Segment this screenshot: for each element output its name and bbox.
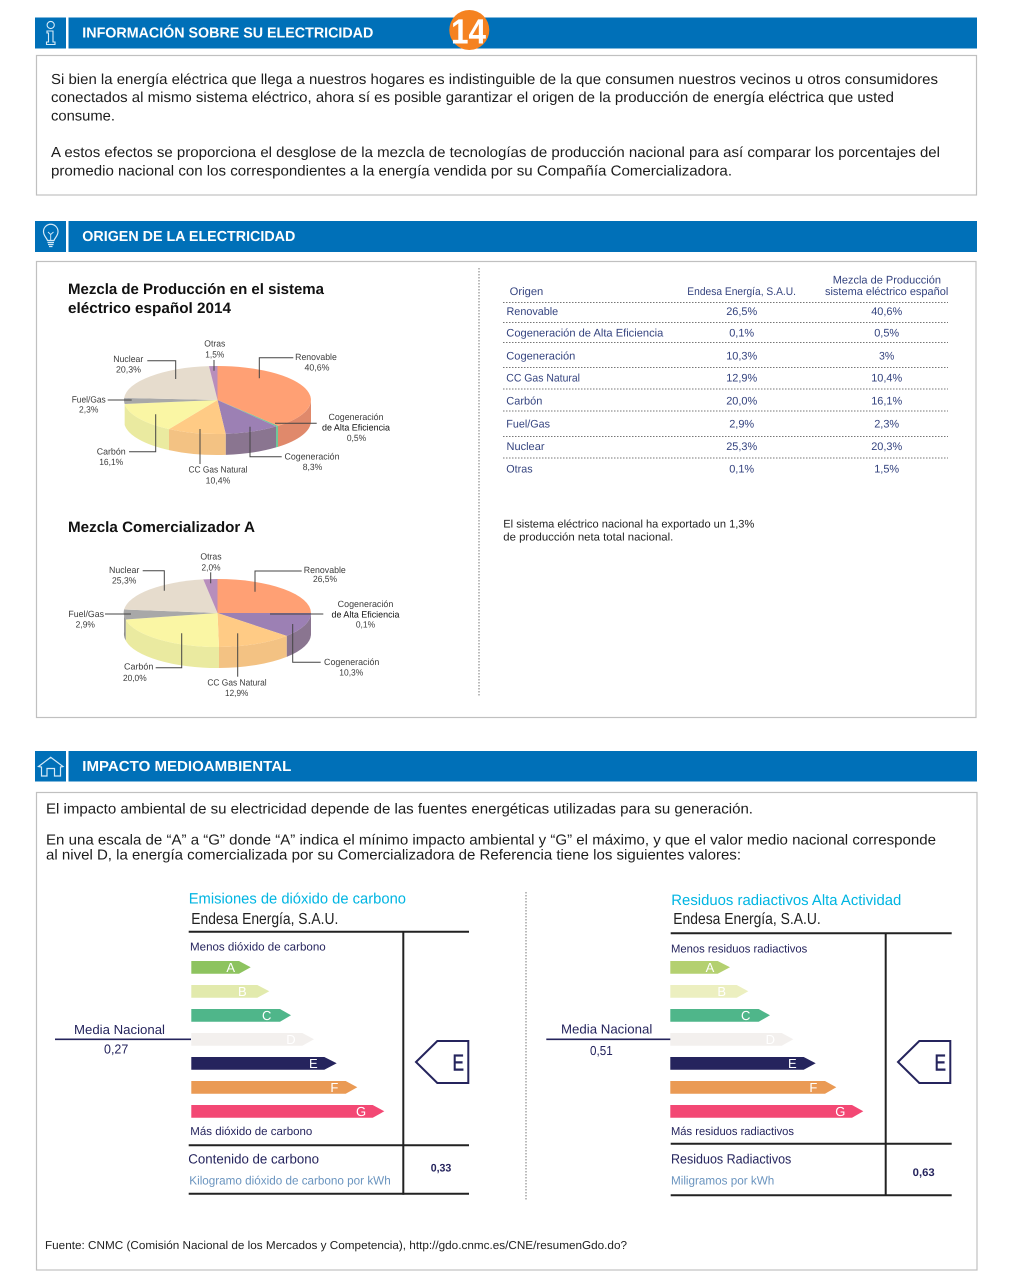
pie chart: mezcla de producción 2014: Nuclear xyxy=(113,354,143,364)
row: otras: 0,1% xyxy=(729,464,754,476)
pie chart: mezcla de producción 2014: Fuel/Gas xyxy=(72,394,106,404)
row: carbón: Carbón xyxy=(506,395,542,407)
media nacional marker xyxy=(546,1021,670,1058)
pie chart: mezcla de producción 2014: 20,3% xyxy=(116,365,141,375)
text block: nota de exportación: El sistema eléctrico nacional ha exportado un 1,3% xyxy=(503,519,755,531)
panel: impacto medioambiental xyxy=(36,792,977,1270)
heading: mezcla de producción xyxy=(68,281,325,317)
rating arrow D: D xyxy=(766,1032,775,1047)
scale top label: Menos dióxido de carbono xyxy=(190,942,326,954)
row: fuel/gas xyxy=(506,418,899,430)
rating arrow D xyxy=(670,1032,793,1047)
row: cogeneración de alta eficiencia xyxy=(506,328,899,340)
table header xyxy=(510,274,948,298)
row: renovable xyxy=(506,306,902,318)
header: impacto medioambiental xyxy=(35,751,977,782)
row: cogeneración: Cogeneración xyxy=(506,350,575,362)
rating arrow E: E xyxy=(788,1056,797,1071)
row: renovable: Renovable xyxy=(506,306,558,318)
scale top label: Menos residuos radiactivos xyxy=(671,943,808,955)
rating arrow F xyxy=(191,1080,357,1095)
pie chart: mezcla comercializador A: 20,0% xyxy=(123,673,147,683)
pie chart: mezcla de producción 2014: 8,3% xyxy=(303,462,322,472)
rating arrow B xyxy=(670,984,748,999)
rating arrow G xyxy=(670,1104,863,1119)
pie chart: mezcla de producción 2014: 1,5% xyxy=(205,349,224,359)
row: cogeneración: 3% xyxy=(879,350,895,362)
row: fuel/gas: 2,9% xyxy=(729,418,754,430)
rating arrow A: A xyxy=(706,960,715,975)
pie chart: mezcla de producción 2014: CC Gas Natural xyxy=(188,465,248,475)
pie chart: mezcla comercializador A: 2,0% xyxy=(202,562,220,572)
row: otras xyxy=(506,464,899,476)
title: Emisiones de dióxido de carbono xyxy=(189,890,406,907)
unit: Kilogramo dióxido de carbono por kWh xyxy=(189,1173,391,1187)
heading: ORIGEN DE LA ELECTRICIDAD xyxy=(82,229,295,245)
rating tag E xyxy=(898,1041,950,1083)
rating arrow E xyxy=(670,1056,816,1071)
header: información sobre su electricidad xyxy=(35,10,977,52)
pie chart: mezcla de producción 2014: Cogeneración xyxy=(328,412,384,422)
pie chart: mezcla de producción 2014 xyxy=(72,339,390,485)
row: nuclear: Nuclear xyxy=(506,441,545,453)
rating arrow D xyxy=(191,1032,314,1047)
pie chart: mezcla comercializador A: Cogeneración xyxy=(324,657,379,667)
media nacional marker: 0,27 xyxy=(104,1041,128,1056)
rating arrow A xyxy=(670,960,730,975)
panel: origen de la electricidad xyxy=(36,262,976,718)
scale bottom label: Más residuos radiactivos xyxy=(671,1126,794,1138)
pie chart: mezcla comercializador A: 12,9% xyxy=(225,688,248,698)
heading: IMPACTO MEDIOAMBIENTAL xyxy=(82,759,291,775)
text block: intro paragraph: conectados al mismo sistema eléctrico, ahora sí es posible garantizar el origen de la producción de energía eléctrica que usted xyxy=(51,90,894,106)
table header: Mezcla de Producción xyxy=(833,274,941,286)
row: cc gas natural xyxy=(506,373,902,385)
pie chart: mezcla de producción 2014: 0,5% xyxy=(347,433,366,443)
pie chart: mezcla comercializador A: Nuclear xyxy=(109,565,139,575)
rating tag E xyxy=(416,1041,468,1083)
value: 0,63 xyxy=(913,1167,935,1179)
rating arrow C: C xyxy=(262,1008,271,1023)
rating arrow G: G xyxy=(356,1104,366,1119)
row: renovable: 26,5% xyxy=(726,306,757,318)
rating arrow B: B xyxy=(238,984,247,999)
badge: 14: 14 xyxy=(451,12,486,52)
table header: Origen xyxy=(510,286,543,298)
panel: introducción xyxy=(36,56,976,195)
header bar xyxy=(68,751,977,782)
text block: impacto ambiental xyxy=(46,802,936,864)
pie chart: mezcla de producción 2014: Renovable xyxy=(295,352,337,362)
energy label: emisiones de dióxido de carbono xyxy=(55,890,469,1195)
rating arrow G xyxy=(191,1104,384,1119)
contenido de carbono: Contenido de carbono xyxy=(188,1152,319,1166)
pie chart: mezcla comercializador A: 25,3% xyxy=(112,576,136,586)
pie chart: mezcla de producción 2014: 16,1% xyxy=(99,457,123,467)
row: cogeneración xyxy=(506,350,895,362)
icon: house xyxy=(35,751,66,782)
header: origen de la electricidad xyxy=(35,221,977,252)
rating arrow C xyxy=(191,1008,291,1023)
energy label: residuos radiactivos xyxy=(546,892,952,1196)
pie chart: mezcla comercializador A: CC Gas Natural xyxy=(207,678,267,688)
rating arrow E: E xyxy=(309,1056,318,1071)
table header: sistema eléctrico español xyxy=(825,286,948,298)
pie chart: mezcla de producción 2014: 10,4% xyxy=(206,475,230,485)
rating arrow B: B xyxy=(717,984,726,999)
media nacional marker: Media Nacional xyxy=(561,1021,652,1036)
pie chart: mezcla de producción 2014: de Alta Eficiencia xyxy=(322,423,390,433)
company name: Endesa Energía, S.A.U. xyxy=(673,911,821,928)
row: nuclear: 25,3% xyxy=(726,441,757,453)
row: cogeneración de alta eficiencia: Cogeneración de Alta Eficiencia xyxy=(506,328,664,340)
pie chart: mezcla comercializador A: de Alta Eficiencia xyxy=(332,609,400,619)
rating arrow F: F xyxy=(330,1080,338,1095)
pie chart: mezcla de producción 2014: 40,6% xyxy=(304,363,330,373)
rating arrow F xyxy=(670,1080,836,1095)
residuos radiactivos: Residuos Radiactivos xyxy=(671,1152,792,1166)
row: carbón: 20,0% xyxy=(726,395,757,407)
rating tag E: E xyxy=(934,1050,946,1076)
icon: information xyxy=(35,18,66,48)
header bar xyxy=(68,221,977,252)
icon: light bulb xyxy=(35,221,66,252)
pie chart: mezcla de producción 2014: Carbón xyxy=(97,446,126,456)
row: fuel/gas: 2,3% xyxy=(874,418,899,430)
rating arrow C: C xyxy=(741,1008,750,1023)
scale bottom label: Más dióxido de carbono xyxy=(190,1126,312,1138)
rating arrow F: F xyxy=(809,1080,817,1095)
text block: second paragraph: A estos efectos se proporciona el desglose de la mezcla de tecnologías de producción nacional para así comparar los porcentajes del xyxy=(51,145,940,161)
row: cogeneración: 10,3% xyxy=(726,350,757,362)
row: cogeneración de alta eficiencia: 0,1% xyxy=(729,328,754,340)
pie chart: mezcla comercializador A xyxy=(68,552,399,698)
heading: mezcla de producción: Mezcla de Producción en el sistema xyxy=(68,281,325,298)
value: 0,33 xyxy=(431,1163,451,1175)
row: carbón: 16,1% xyxy=(871,395,902,407)
media nacional marker: Media Nacional xyxy=(74,1022,165,1037)
text block: nota de exportación: de producción neta total nacional. xyxy=(503,532,673,544)
media nacional marker xyxy=(55,1022,191,1056)
pie chart: mezcla comercializador A: 10,3% xyxy=(339,668,363,678)
row: nuclear xyxy=(506,441,902,453)
unit: Miligramos por kWh xyxy=(671,1173,774,1187)
company name: Endesa Energía, S.A.U. xyxy=(191,911,338,928)
text block: intro paragraph: Si bien la energía eléctrica que llega a nuestros hogares es indistinguible de la que consumen nuestros vecinos u otros consumidores xyxy=(51,72,938,88)
text block: impacto ambiental: al nivel D, la energía comercializada por su Comercializadora de Referencia tiene los siguientes valores: xyxy=(46,848,741,864)
rating arrow E xyxy=(191,1056,337,1071)
row: otras: Otras xyxy=(506,464,533,476)
media nacional marker: 0,51 xyxy=(590,1043,613,1058)
rating arrow C xyxy=(670,1008,770,1023)
rating arrow D: D xyxy=(286,1032,296,1047)
row: cc gas natural: CC Gas Natural xyxy=(506,373,580,385)
row: cc gas natural: 12,9% xyxy=(726,373,757,385)
text block: second paragraph: promedio nacional con los correspondientes a la energía vendida por su Compañía Comercializadora. xyxy=(51,164,732,180)
row: renovable: 40,6% xyxy=(871,306,902,318)
heading: INFORMACIÓN SOBRE SU ELECTRICIDAD xyxy=(82,24,373,41)
rating tag E: E xyxy=(452,1050,464,1076)
pie chart: mezcla comercializador A: Renovable xyxy=(304,565,346,575)
row: cogeneración de alta eficiencia: 0,5% xyxy=(874,328,899,340)
row: carbón xyxy=(506,395,902,407)
header bar xyxy=(68,18,977,48)
pie chart: mezcla comercializador A: 0,1% xyxy=(356,620,375,630)
row: nuclear: 20,3% xyxy=(871,441,902,453)
rating arrow A: A xyxy=(226,960,235,975)
pie chart: mezcla comercializador A: Carbón xyxy=(124,661,153,671)
rating arrow A xyxy=(191,960,251,975)
source note: Fuente: CNMC (Comisión Nacional de los Mercados y Competencia), http://gdo.cnmc.es/CNE/resumenGdo.do? xyxy=(45,1240,627,1252)
heading: mezcla comercializador A: Mezcla Comercializador A xyxy=(68,519,255,536)
pie chart: mezcla de producción 2014: Otras xyxy=(204,339,226,349)
pie chart: mezcla comercializador A: Cogeneración xyxy=(338,599,393,609)
pie chart: mezcla comercializador A: 2,9% xyxy=(76,620,95,630)
pie chart: mezcla comercializador A: Otras xyxy=(200,552,222,562)
text block: impacto ambiental: En una escala de “A” a “G” donde “A” indica el mínimo impacto ambiental y “G” el máximo, y que el valor medio nacional corresponde xyxy=(46,832,936,848)
row: otras: 1,5% xyxy=(874,464,899,476)
row: cc gas natural: 10,4% xyxy=(871,373,902,385)
pie chart: mezcla comercializador A: 26,5% xyxy=(313,574,337,584)
pie chart: mezcla comercializador A: Fuel/Gas xyxy=(68,609,105,619)
text block: impacto ambiental: El impacto ambiental de su electricidad depende de las fuentes energéticas utilizadas para su generación. xyxy=(46,802,753,818)
text block: second paragraph xyxy=(51,145,940,180)
rating arrow B xyxy=(191,984,269,999)
table header: Endesa Energía, S.A.U. xyxy=(687,286,796,298)
row: fuel/gas: Fuel/Gas xyxy=(506,418,550,430)
rating arrow G: G xyxy=(835,1104,845,1119)
text block: nota de exportación xyxy=(503,519,755,544)
table: origen de la electricidad xyxy=(503,274,948,476)
heading: mezcla de producción: eléctrico español 2014 xyxy=(68,300,232,317)
pie chart: mezcla de producción 2014: 2,3% xyxy=(79,405,98,415)
title: Residuos radiactivos Alta Actividad xyxy=(671,892,901,909)
pie chart: mezcla de producción 2014: Cogeneración xyxy=(284,451,340,461)
text block: intro paragraph xyxy=(51,72,938,124)
text block: intro paragraph: consume. xyxy=(51,108,115,124)
